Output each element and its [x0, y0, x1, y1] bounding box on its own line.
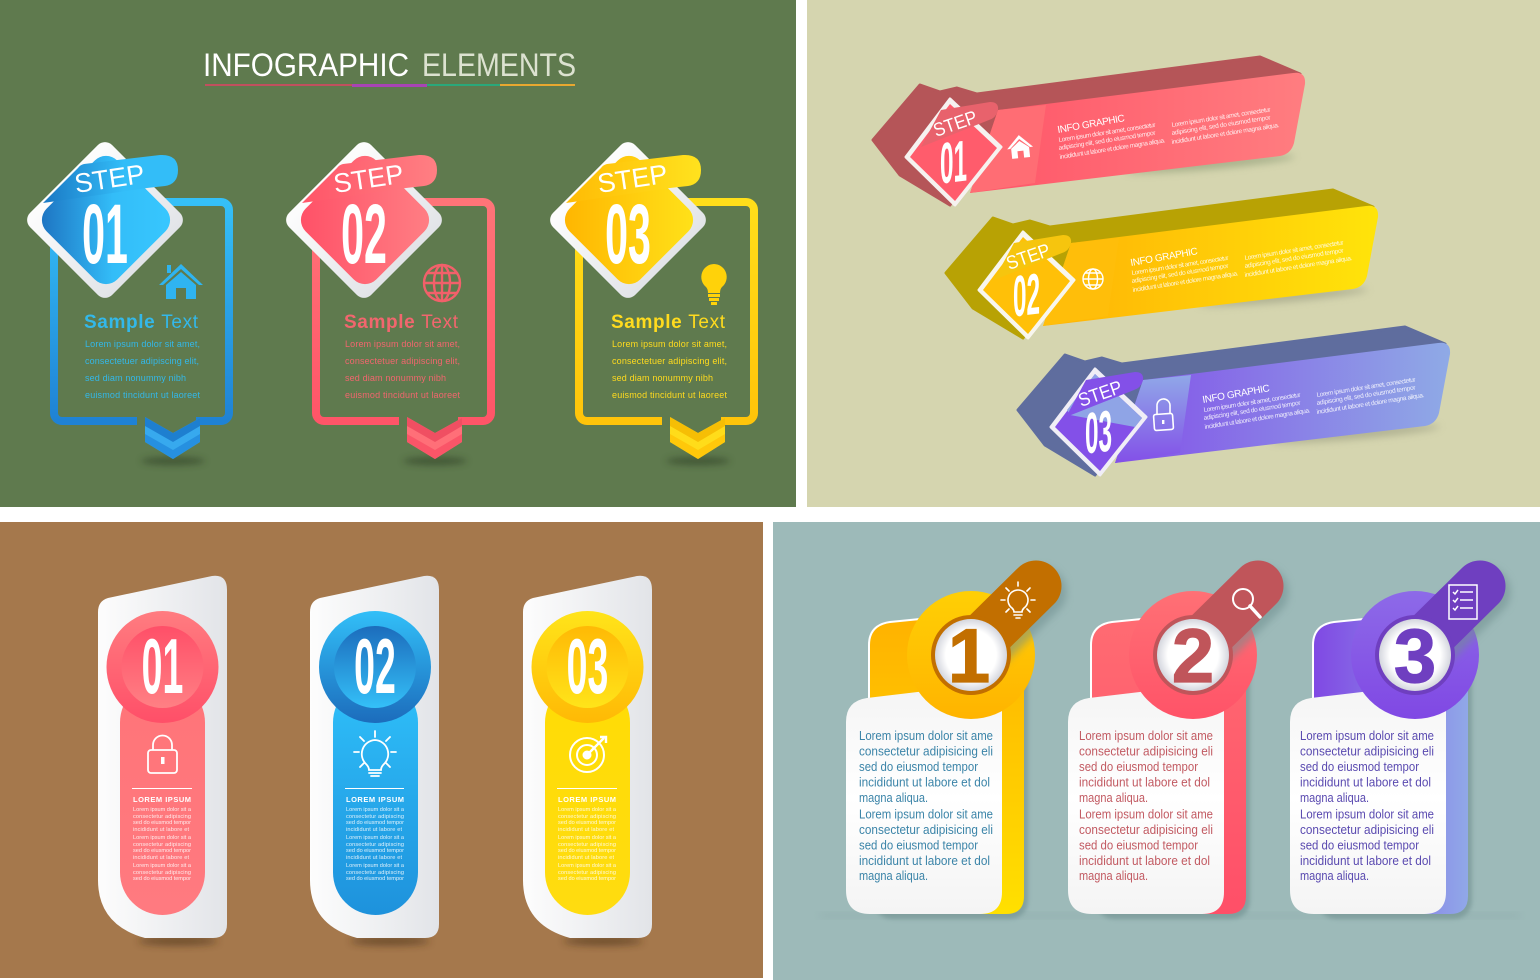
text block: consectetur adipisicing eli — [1300, 744, 1434, 758]
icon: bulb — [354, 731, 396, 776]
front face — [1043, 206, 1378, 326]
text block: consectetur adipiscing — [558, 842, 616, 848]
step diamond: 01 — [82, 188, 128, 282]
text block: LOREM IPSUM — [558, 795, 616, 804]
step diamond: 02 — [1013, 263, 1040, 330]
white note — [846, 682, 1002, 914]
text block — [859, 729, 993, 883]
text block: sed do eiusmod tempor — [346, 848, 404, 854]
text block: sed diam nonummy nibh — [345, 373, 446, 383]
panel: numbered note cards — [773, 522, 1540, 980]
number circle — [319, 611, 431, 723]
pill — [333, 680, 418, 915]
banner: step 03 purple — [1018, 327, 1450, 475]
text block: Lorem ipsum dolor sit ame — [1300, 808, 1434, 822]
step diamond — [282, 138, 446, 302]
text block: adipiscing elit, sed do eiusmod tempor — [1058, 130, 1157, 152]
text block: sed do eiusmod tempor — [558, 876, 616, 882]
number badge — [1129, 586, 1263, 719]
arrow: chevron — [670, 417, 725, 459]
number circle: 02 — [354, 623, 396, 710]
number badge: 2 — [1172, 614, 1214, 699]
card: step 03 yellow — [546, 138, 754, 465]
text block — [84, 312, 200, 400]
step diamond: STEP — [72, 159, 147, 199]
text block: Lorem ipsum dolor sit amet, — [345, 339, 460, 349]
card: step 02 red — [282, 138, 491, 465]
card: 01 red — [98, 576, 227, 945]
icon: globe — [424, 265, 460, 301]
icon: lock — [148, 736, 177, 773]
arrow: chevron — [145, 417, 200, 459]
icon: magnifier — [1233, 589, 1260, 617]
step diamond: STEP — [931, 107, 980, 142]
text block: consectetur adipiscing — [133, 842, 191, 848]
text block: INFO GRAPHIC — [1130, 246, 1199, 269]
icon: checklist — [1449, 585, 1477, 619]
text block: consectetur adipisicing eli — [859, 823, 993, 837]
text block: Lorem ipsum dolor sit ame — [859, 808, 993, 822]
text block: incididunt ut labore et dol — [1300, 854, 1431, 868]
text block: incididunt ut labore et dolore magna aliqua. — [1316, 392, 1425, 416]
text block: Lorem ipsum dolor sit a — [346, 863, 405, 869]
text block: Lorem ipsum dolor sit amet, — [612, 339, 727, 349]
card: 2 red — [1068, 586, 1263, 919]
step diamond: STEP — [1076, 377, 1125, 412]
text block: sed do eiusmod tempor — [1300, 760, 1419, 774]
text block: consectetur adipisicing eli — [859, 744, 993, 758]
text block: LOREM IPSUM — [133, 795, 191, 804]
text block: incididunt ut labore et — [133, 827, 189, 833]
text block: INFO GRAPHIC — [1202, 383, 1271, 406]
text block: incididunt ut labore et — [346, 855, 402, 861]
text block: Lorem ipsum dolor sit amet, consectetur — [1058, 122, 1157, 144]
text block: consectetur adipiscing — [346, 842, 404, 848]
text block: incididunt ut labore et — [133, 855, 189, 861]
frame — [316, 202, 491, 421]
text block: adipiscing elit, sed do eiusmod tempor — [1244, 247, 1345, 270]
text block: consectetur adipiscing — [133, 814, 191, 820]
step diamond: STEP — [331, 159, 406, 199]
step diamond — [906, 99, 1001, 205]
text block: magna aliqua. — [1300, 869, 1369, 883]
text block: incididunt ut labore et dolore magna aliqua. — [1132, 270, 1239, 294]
icon: lock — [1153, 399, 1174, 431]
step diamond: 01 — [940, 130, 967, 197]
text block: sed do eiusmod tempor — [133, 876, 191, 882]
text block: Lorem ipsum dolor sit amet, consectetur — [1131, 255, 1230, 277]
panel: vertical pill cards — [0, 522, 763, 978]
text block: Lorem ipsum dolor sit ame — [1079, 808, 1213, 822]
text block: magna aliqua. — [1300, 791, 1369, 805]
title — [203, 47, 576, 87]
text block — [344, 312, 460, 400]
text block: magna aliqua. — [1079, 869, 1148, 883]
text block: Lorem ipsum dolor sit a — [133, 835, 192, 841]
step diamond: STEP — [595, 159, 670, 199]
text block: consectetur adipiscing — [346, 870, 404, 876]
card: 03 yellow — [523, 576, 652, 945]
text block: LOREM IPSUM — [346, 795, 404, 804]
step diamond — [23, 138, 187, 302]
text block — [132, 788, 192, 882]
icon: bulb — [701, 264, 727, 305]
text block: Lorem ipsum dolor sit ame — [1300, 729, 1434, 743]
text block: Lorem ipsum dolor sit amet, consectetur — [1244, 239, 1345, 262]
text block: magna aliqua. — [859, 869, 928, 883]
text block: consectetur adipiscing — [558, 870, 616, 876]
frame — [579, 202, 754, 421]
text block: incididunt ut labore et — [558, 855, 614, 861]
text block: Sample Text — [611, 312, 726, 333]
frame — [54, 202, 229, 421]
text block: incididunt ut labore et dol — [1300, 776, 1431, 790]
text block: consectetur adipiscing — [133, 870, 191, 876]
text block: sed do eiusmod tempor — [346, 876, 404, 882]
icon: globe — [1083, 269, 1103, 289]
text block: incididunt ut labore et dol — [1079, 776, 1210, 790]
number circle: 03 — [567, 623, 608, 710]
text block: Lorem ipsum dolor sit amet, — [85, 339, 200, 349]
text block: incididunt ut labore et — [346, 827, 402, 833]
banner: step 02 yellow — [946, 190, 1378, 338]
text block: sed do eiusmod tempor — [859, 838, 978, 852]
icon: home — [1006, 134, 1034, 159]
text block: Lorem ipsum dolor sit ame — [859, 729, 993, 743]
white note — [1290, 682, 1446, 914]
arrow side faces — [1018, 327, 1445, 475]
text block: incididunt ut labore et dol — [859, 854, 990, 868]
text block: consectetur adipiscing — [346, 814, 404, 820]
number badge — [907, 586, 1041, 719]
text block: incididunt ut labore et dolore magna aliqua. — [1244, 255, 1353, 279]
arrow side faces — [946, 190, 1373, 338]
text block: euismod tincidunt ut laoreet — [345, 390, 460, 400]
panel: 3D arrow banners — [807, 0, 1540, 507]
text block: euismod tincidunt ut laoreet — [612, 390, 727, 400]
step diamond: 03 — [1085, 400, 1112, 467]
text block: Sample Text — [344, 312, 459, 333]
text block: adipiscing elit, sed do eiusmod tempor — [1203, 400, 1302, 422]
arrow side faces — [873, 57, 1300, 205]
icon: target — [570, 737, 606, 772]
text block: adipiscing elit, sed do eiusmod tempor — [1171, 114, 1272, 137]
arrow: chevron — [407, 417, 462, 459]
number badge — [1351, 586, 1485, 719]
text block: consectetur adipisicing eli — [1079, 744, 1213, 758]
text block: sed diam nonummy nibh — [612, 373, 713, 383]
text block: consectetur adipisicing eli — [1079, 823, 1213, 837]
front face — [970, 73, 1305, 193]
text block: consectetuer adipiscing elit, — [85, 356, 199, 366]
icon: bulb — [1001, 582, 1035, 618]
text block: consectetuer adipiscing elit, — [612, 356, 727, 366]
text block: magna aliqua. — [1079, 791, 1148, 805]
step diamond — [979, 232, 1074, 338]
number circle: 01 — [142, 623, 183, 710]
banner: step 01 red — [873, 57, 1305, 205]
text block: incididunt ut labore et dolore magna aliqua. — [1204, 407, 1311, 431]
text block: sed do eiusmod tempor — [1300, 838, 1419, 852]
text block: Lorem ipsum dolor sit a — [558, 807, 617, 813]
white note — [1068, 682, 1224, 914]
text block: magna aliqua. — [859, 791, 928, 805]
text block: incididunt ut labore et — [558, 827, 614, 833]
text block: sed do eiusmod tempor — [859, 760, 978, 774]
text block — [345, 788, 405, 882]
text block: sed do eiusmod tempor — [1079, 838, 1198, 852]
text block: sed diam nonummy nibh — [85, 373, 186, 383]
text block: incididunt ut labore et dolore magna aliqua. — [1171, 122, 1280, 146]
text block: consectetuer adipiscing elit, — [345, 356, 460, 366]
panel: green step frames — [0, 0, 796, 507]
text block: Lorem ipsum dolor sit a — [558, 863, 617, 869]
step diamond: 02 — [341, 188, 387, 282]
text block — [611, 312, 727, 400]
title: ELEMENTS — [422, 47, 576, 83]
text block: sed do eiusmod tempor — [558, 820, 616, 826]
text block: Lorem ipsum dolor sit amet, consectetur — [1203, 392, 1302, 414]
step diamond — [1051, 369, 1146, 475]
icon: home — [159, 264, 203, 299]
number badge: 1 — [948, 614, 990, 699]
card: 1 orange — [846, 582, 1041, 919]
text block: consectetur adipisicing eli — [1300, 823, 1434, 837]
text block: Lorem ipsum dolor sit a — [558, 835, 617, 841]
text block: euismod tincidunt ut laoreet — [85, 390, 200, 400]
step diamond: STEP — [1004, 240, 1053, 275]
text block: adipiscing elit, sed do eiusmod tempor — [1131, 263, 1230, 285]
text block — [1079, 729, 1213, 883]
text block: Lorem ipsum dolor sit amet, consectetur — [1171, 106, 1272, 129]
number circle — [106, 611, 218, 723]
front face — [1115, 343, 1450, 463]
card: 3 purple — [1290, 585, 1485, 919]
pill — [545, 680, 630, 915]
text block — [1057, 106, 1280, 161]
text block: sed do eiusmod tempor — [133, 848, 191, 854]
text block — [1130, 239, 1353, 294]
text block — [1300, 729, 1434, 883]
number badge: 3 — [1394, 614, 1436, 699]
text block: consectetur adipiscing — [558, 814, 616, 820]
text block: incididunt ut labore et dolore magna aliqua. — [1059, 137, 1166, 161]
number circle — [532, 611, 644, 723]
text block: incididunt ut labore et dol — [859, 776, 990, 790]
card: step 01 blue — [23, 138, 229, 465]
card: 02 blue — [310, 576, 439, 945]
text block: Lorem ipsum dolor sit a — [133, 863, 192, 869]
text block: sed do eiusmod tempor — [346, 820, 404, 826]
text block: incididunt ut labore et dol — [1079, 854, 1210, 868]
text block: sed do eiusmod tempor — [1079, 760, 1198, 774]
text block: Lorem ipsum dolor sit amet, consectetur — [1316, 376, 1417, 399]
text block — [1202, 376, 1425, 431]
text block: INFO GRAPHIC — [1057, 113, 1126, 136]
text block — [557, 788, 617, 882]
text block: Sample Text — [84, 312, 199, 333]
text block: Lorem ipsum dolor sit a — [346, 807, 405, 813]
text block: Lorem ipsum dolor sit a — [346, 835, 405, 841]
pill — [120, 680, 205, 915]
step diamond: 03 — [605, 188, 651, 282]
text block: sed do eiusmod tempor — [558, 848, 616, 854]
text block: Lorem ipsum dolor sit ame — [1079, 729, 1213, 743]
text block: Lorem ipsum dolor sit a — [133, 807, 192, 813]
step diamond — [546, 138, 710, 302]
title: INFOGRAPHIC — [203, 47, 409, 83]
text block: sed do eiusmod tempor — [133, 820, 191, 826]
text block: adipiscing elit, sed do eiusmod tempor — [1316, 384, 1417, 407]
